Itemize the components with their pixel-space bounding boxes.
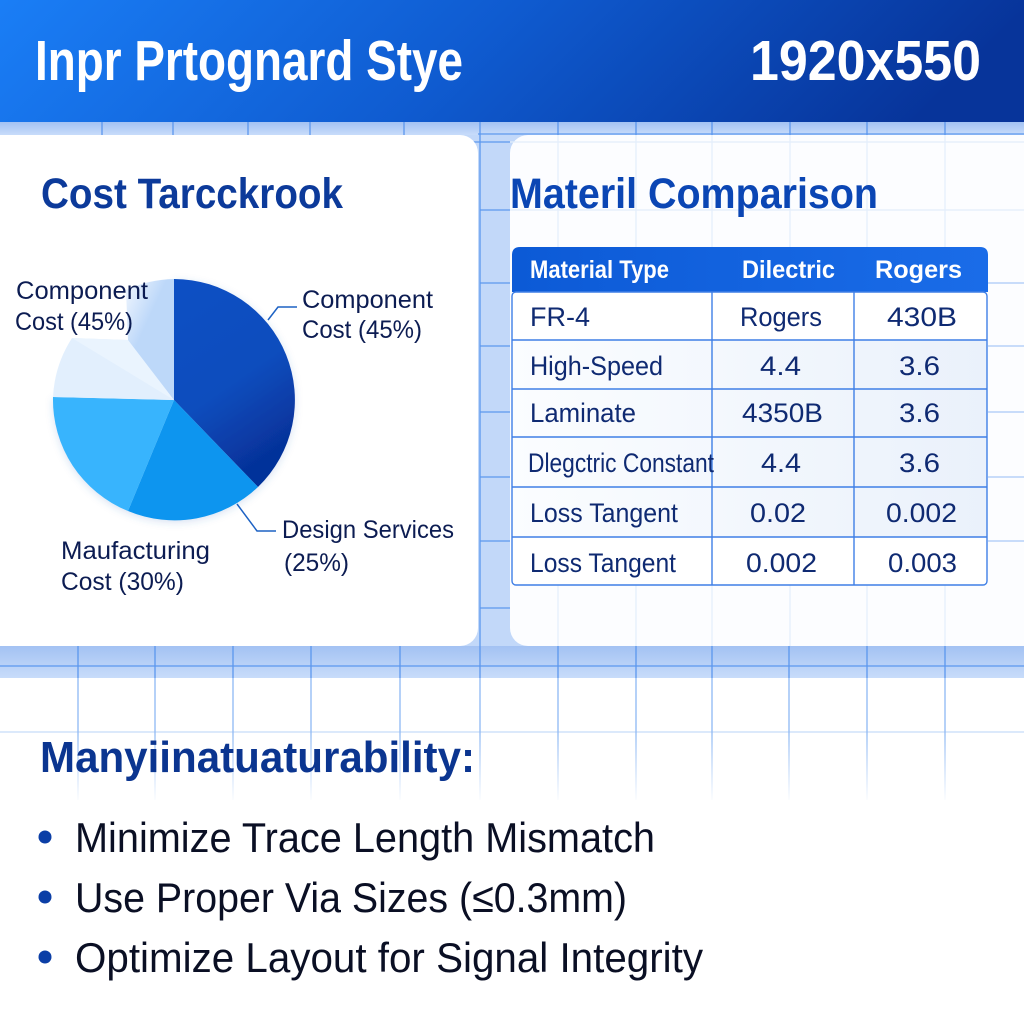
header banner bbox=[0, 0, 1024, 122]
table row: Loss Tangent 2 bbox=[530, 548, 957, 578]
label: component cost right: Cost (45%) bbox=[302, 316, 422, 344]
leader line: component cost bbox=[268, 307, 297, 320]
table row: FR-4: 430B bbox=[887, 302, 957, 332]
table row: High-Speed: 3.6 bbox=[899, 351, 940, 381]
table row: Dielectric Constant: Dlegctric Constant bbox=[528, 448, 714, 478]
table header bbox=[512, 247, 988, 292]
table row: Dielectric Constant bbox=[528, 448, 940, 478]
table row: FR-4: FR-4 bbox=[530, 302, 590, 332]
table row: Loss Tangent 2: 0.002 bbox=[746, 548, 817, 578]
table row: Loss Tangent 2: 0.003 bbox=[888, 548, 957, 578]
section heading: Manyiinatuaturability: bbox=[40, 733, 475, 782]
table row: Loss Tangent: 0.02 bbox=[750, 498, 806, 528]
bullet 1: Minimize Trace Length Mismatch bbox=[75, 814, 655, 861]
table header: Dilectric bbox=[742, 256, 835, 284]
label: design services: Design Services bbox=[282, 516, 454, 544]
table row: Laminate: 3.6 bbox=[899, 398, 940, 428]
header dimensions: 1920x550 bbox=[750, 29, 981, 93]
label: design services: (25%) bbox=[284, 549, 349, 577]
table row: High-Speed bbox=[530, 351, 940, 381]
label: component cost left: Cost (45%) bbox=[15, 308, 133, 336]
label: design services bbox=[282, 516, 454, 577]
table header: Rogers bbox=[875, 256, 962, 284]
bullet 2: Use Proper Via Sizes (≤0.3mm) bbox=[75, 874, 627, 921]
table row: FR-4 bbox=[530, 302, 957, 332]
header title: Inpr Prtognard Stye bbox=[35, 29, 463, 93]
table row: FR-4: Rogers bbox=[740, 302, 822, 332]
label: component cost right bbox=[302, 286, 433, 344]
bullet 3: Optimize Layout for Signal Integrity bbox=[75, 934, 703, 981]
table row: Loss Tangent: Loss Tangent bbox=[530, 498, 678, 528]
table row: Loss Tangent: 0.002 bbox=[886, 498, 957, 528]
label: component cost left bbox=[15, 277, 148, 336]
table row: Laminate: 4350B bbox=[742, 398, 823, 428]
label: manufacturing cost: Maufacturing bbox=[61, 537, 210, 565]
material heading: Materil Comparison bbox=[510, 170, 878, 218]
table row: Laminate: Laminate bbox=[530, 398, 636, 428]
label: component cost right: Component bbox=[302, 286, 433, 314]
table row: Loss Tangent 2: Loss Tangent bbox=[530, 548, 676, 578]
leader line: design services bbox=[237, 504, 276, 531]
table row: High-Speed: 4.4 bbox=[760, 351, 801, 381]
table row: Loss Tangent bbox=[530, 498, 957, 528]
label: manufacturing cost bbox=[61, 537, 210, 596]
table row: Dielectric Constant: 4.4 bbox=[761, 448, 801, 478]
table row: High-Speed: High-Speed bbox=[530, 351, 663, 381]
table row: Laminate bbox=[530, 398, 940, 428]
table row: Dielectric Constant: 3.6 bbox=[899, 448, 940, 478]
page background grid bbox=[0, 122, 1024, 803]
manufacturability section bbox=[38, 733, 703, 981]
pie chart bbox=[53, 279, 295, 520]
cost heading: Cost Tarcckrook bbox=[41, 170, 343, 218]
panel: material comparison bbox=[510, 135, 1024, 646]
panel: cost breakdown bbox=[0, 135, 478, 646]
table header: Material Type bbox=[530, 256, 669, 284]
bullet list bbox=[38, 814, 703, 981]
label: manufacturing cost: Cost (30%) bbox=[61, 568, 184, 596]
label: component cost left: Component bbox=[16, 277, 148, 305]
comparison table bbox=[512, 247, 988, 585]
